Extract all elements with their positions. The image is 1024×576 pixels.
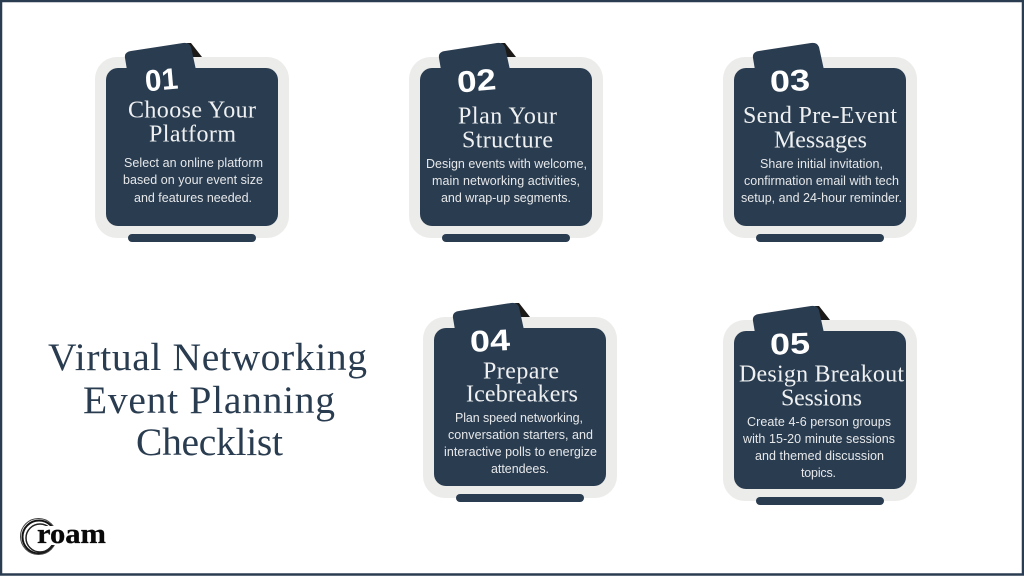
number 04: 04 <box>469 324 511 359</box>
description: interactive polls to energize <box>444 445 597 459</box>
description: Design events with welcome, <box>426 157 587 171</box>
description: Create 4-6 person groups <box>747 415 891 429</box>
description: and themed discussion <box>755 449 884 463</box>
description: conversation starters, and <box>448 428 593 442</box>
description: and features needed. <box>134 191 252 205</box>
number 03: 03 <box>769 64 811 99</box>
heading: Messages <box>774 128 867 154</box>
description: and wrap-up segments. <box>441 191 571 205</box>
description: with 15-20 minute sessions <box>742 432 895 446</box>
heading: Platform <box>149 122 236 148</box>
description: topics. <box>801 466 836 480</box>
heading: Icebreakers <box>466 382 578 408</box>
heading: Design Breakout <box>739 362 904 388</box>
title: Checklist <box>136 420 283 464</box>
heading: Prepare <box>483 358 559 384</box>
heading: Send Pre-Event <box>743 103 897 129</box>
description: attendees. <box>491 462 549 476</box>
description: confirmation email with tech <box>744 174 899 188</box>
description: Plan speed networking, <box>455 411 583 425</box>
heading: Plan Your <box>458 104 557 130</box>
title: Event Planning <box>83 378 335 422</box>
description: based on your event size <box>123 173 263 187</box>
description: Share initial invitation, <box>760 157 883 171</box>
card 4: prepare icebreakers <box>423 303 617 502</box>
title <box>48 335 367 464</box>
heading: Choose Your <box>128 98 256 124</box>
card 3: send pre-event messages <box>723 43 917 242</box>
heading: Sessions <box>781 386 862 412</box>
title: Virtual Networking <box>48 335 367 379</box>
card 5: design breakout sessions <box>723 306 917 505</box>
number 01: 01 <box>144 63 179 98</box>
card 2: plan your structure <box>409 43 603 242</box>
logo: roam: roam <box>37 518 106 550</box>
description: main networking activities, <box>432 174 580 188</box>
logo: roam <box>20 518 106 554</box>
description: setup, and 24-hour reminder. <box>741 191 902 205</box>
card 1: choose your platform <box>95 43 289 242</box>
number 02: 02 <box>456 63 497 100</box>
number 05: 05 <box>769 327 811 362</box>
description: Select an online platform <box>124 156 263 170</box>
heading: Structure <box>462 128 553 154</box>
